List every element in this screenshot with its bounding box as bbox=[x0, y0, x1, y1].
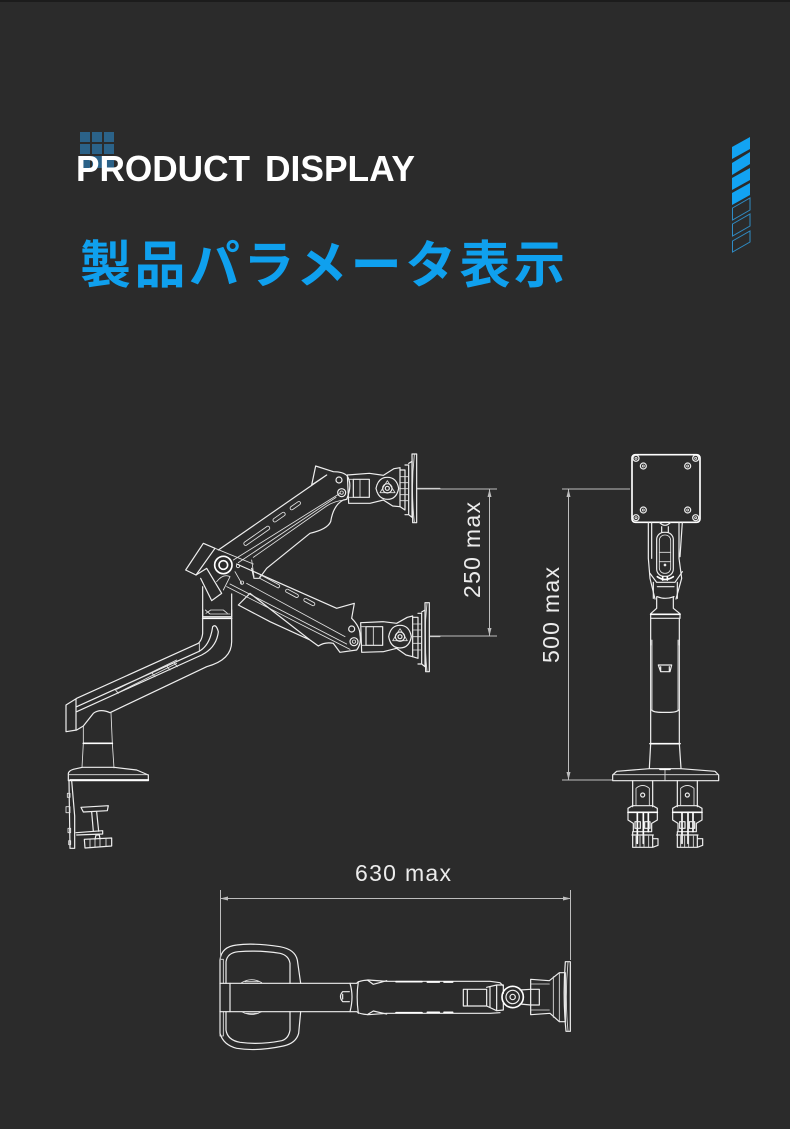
front arm and capsule bbox=[648, 522, 682, 645]
post bbox=[649, 640, 681, 768]
head joint bbox=[463, 985, 539, 1011]
base post bbox=[82, 713, 114, 768]
dimension: 500 max bbox=[538, 489, 630, 780]
dimension: 500 max: 500 max bbox=[538, 566, 564, 663]
left clamp bbox=[628, 781, 658, 847]
diagram: side view lower arm, base and clamp bbox=[66, 610, 232, 848]
icon: blue square grid bbox=[80, 132, 114, 168]
VESA plate bbox=[632, 455, 700, 522]
dimension: 630 max: 630 max bbox=[355, 860, 452, 886]
lower monitor mount bbox=[361, 603, 429, 672]
clamp bbox=[66, 781, 112, 848]
base bbox=[613, 769, 719, 781]
dimension: 250 max bbox=[417, 489, 497, 636]
diagram: front view post, base and clamps bbox=[613, 640, 719, 847]
base plate bbox=[220, 944, 301, 1050]
icon: progress stripes bbox=[732, 137, 750, 252]
diagram: front view upper part bbox=[632, 455, 700, 645]
heading: product display bbox=[76, 148, 415, 189]
right clamp bbox=[673, 781, 703, 847]
upper arm bbox=[218, 466, 350, 578]
dimension: 250 max: 250 max bbox=[459, 502, 485, 598]
heading: product display: DISPLAY bbox=[265, 148, 415, 189]
diagram: side view monitor arms, upper and lower bbox=[186, 454, 440, 672]
dimension tick upper bbox=[417, 487, 440, 490]
monitor mount bbox=[531, 962, 570, 1031]
heading: Japanese title: 製品パラメータ表示 bbox=[80, 237, 565, 294]
central joint bbox=[186, 543, 254, 601]
dimension: 630 max bbox=[220, 860, 571, 960]
diagram: top view bbox=[220, 944, 570, 1050]
upper monitor mount bbox=[347, 454, 417, 523]
heading: product display: PRODUCT bbox=[76, 148, 250, 189]
dimension tick lower bbox=[429, 635, 440, 638]
lower arm body bbox=[66, 610, 232, 732]
post connector bbox=[203, 587, 232, 618]
lower arm bbox=[227, 564, 360, 652]
arm body bbox=[220, 980, 503, 1015]
base foot bbox=[68, 767, 148, 781]
